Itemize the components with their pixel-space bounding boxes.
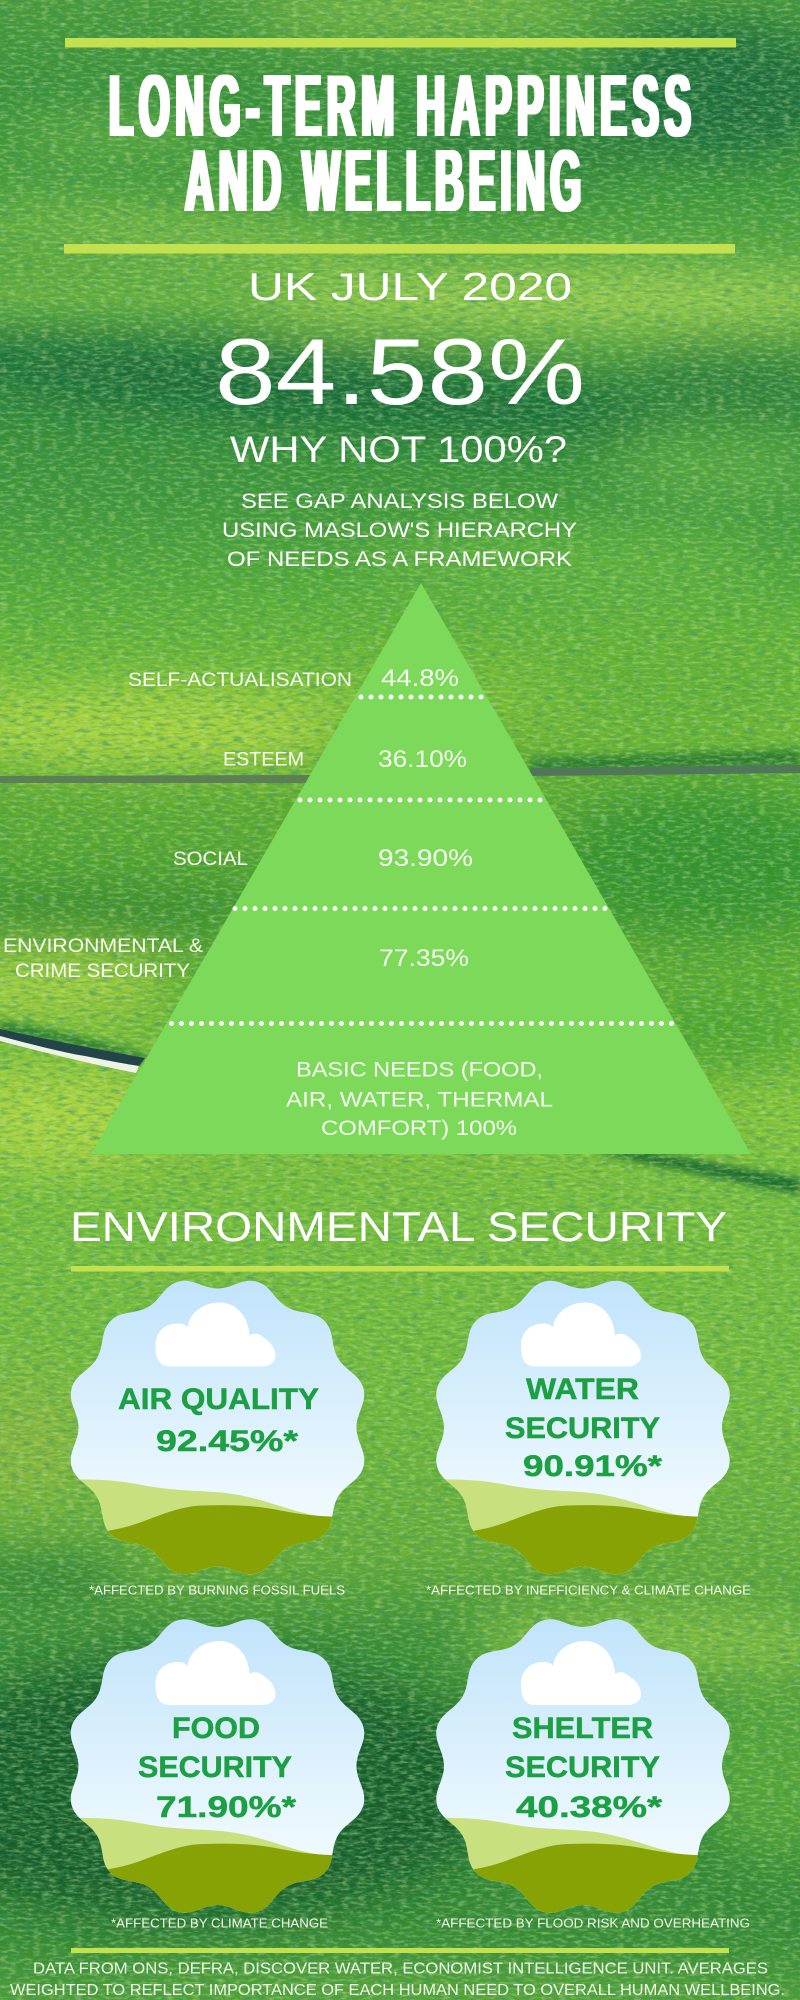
tier: esteem: [223, 746, 467, 773]
tier: environmental and crime security: CRIME SECURITY: [15, 961, 190, 982]
pyramid triangle: [91, 583, 751, 1154]
source note: DATA FROM ONS, DEFRA, DISCOVER WATER, ECONOMIST INTELLIGENCE UNIT. AVERAGES: [33, 1960, 768, 1978]
intro text: USING MASLOW'S HIERARCHY: [222, 519, 577, 542]
stream: [0, 1029, 145, 1073]
question heading: WHY NOT 100%?: [230, 429, 567, 470]
title: LONG-TERM HAPPINESS: [109, 57, 691, 155]
badge: shelter security: SHELTER: [512, 1712, 653, 1745]
footnote: shelter security: *AFFECTED BY FLOOD RISK AND OVERHEATING: [436, 1916, 750, 1930]
badge: air quality: 92.45%*: [156, 1425, 298, 1458]
tier: environmental and crime security: ENVIRONMENTAL &: [3, 936, 203, 957]
section divider bar: [71, 1266, 729, 1272]
badge: water security: 90.91%*: [523, 1450, 662, 1483]
tier: basic needs: AIR, WATER, THERMAL: [286, 1088, 553, 1112]
intro text: OF NEEDS AS A FRAMEWORK: [227, 548, 572, 571]
tier: self-actualisation: SELF-ACTUALISATION: [128, 670, 352, 691]
footnote: water security: *AFFECTED BY INEFFICIENCY & CLIMATE CHANGE: [426, 1582, 751, 1598]
tier: basic needs: COMFORT) 100%: [321, 1117, 517, 1140]
intro text: SEE GAP ANALYSIS BELOW: [241, 490, 558, 513]
title: AND WELLBEING: [185, 132, 581, 230]
footer divider bar: [71, 1948, 729, 1953]
tier: basic needs: [286, 1058, 553, 1140]
tier: social: SOCIAL: [173, 849, 248, 870]
tier: environmental and crime security: [3, 936, 469, 982]
badge: air quality: AIR QUALITY: [118, 1383, 319, 1416]
tier: social: 93.90%: [378, 845, 473, 872]
source note: [10, 1960, 785, 1999]
badge: food security: 71.90%*: [156, 1791, 296, 1824]
section heading: environmental security: ENVIRONMENTAL SECURITY: [70, 1203, 727, 1250]
footnote: food security: *AFFECTED BY CLIMATE CHANGE: [111, 1916, 328, 1930]
badge: water security: SECURITY: [505, 1412, 660, 1445]
badge: food security: SECURITY: [138, 1751, 292, 1784]
footnote: air quality: *AFFECTED BY BURNING FOSSIL FUELS: [89, 1582, 345, 1598]
tier: basic needs: BASIC NEEDS (FOOD,: [296, 1058, 543, 1082]
tier: self-actualisation: 44.8%: [381, 665, 459, 692]
source note: WEIGHTED TO REFLECT IMPORTANCE OF EACH HUMAN NEED TO OVERALL HUMAN WELLBEING.: [10, 1982, 785, 1999]
badge: water security: [436, 1280, 730, 1574]
badge: shelter security: [436, 1619, 730, 1913]
badge: air quality: [70, 1280, 364, 1574]
badge: water security: WATER: [526, 1373, 639, 1406]
intro text: [222, 490, 577, 571]
badge: food security: FOOD: [172, 1712, 260, 1745]
tier: esteem: 36.10%: [378, 746, 467, 773]
subtitle: UK July 2020: UK JULY 2020: [248, 266, 572, 309]
badge: shelter security: SECURITY: [505, 1751, 660, 1784]
tier: social: [173, 845, 473, 872]
badge: food security: [70, 1619, 364, 1913]
tier: self-actualisation: [128, 665, 459, 692]
top divider bar: [65, 38, 736, 48]
title: [109, 57, 691, 230]
pyramid chart: Maslow's hierarchy: [3, 583, 751, 1154]
badge: shelter security: 40.38%*: [516, 1791, 662, 1824]
tier: esteem: ESTEEM: [223, 750, 304, 770]
title divider bar: [64, 244, 735, 254]
headline number: 84.58%: [215, 319, 585, 424]
tier: environmental and crime security: 77.35%: [379, 945, 469, 972]
